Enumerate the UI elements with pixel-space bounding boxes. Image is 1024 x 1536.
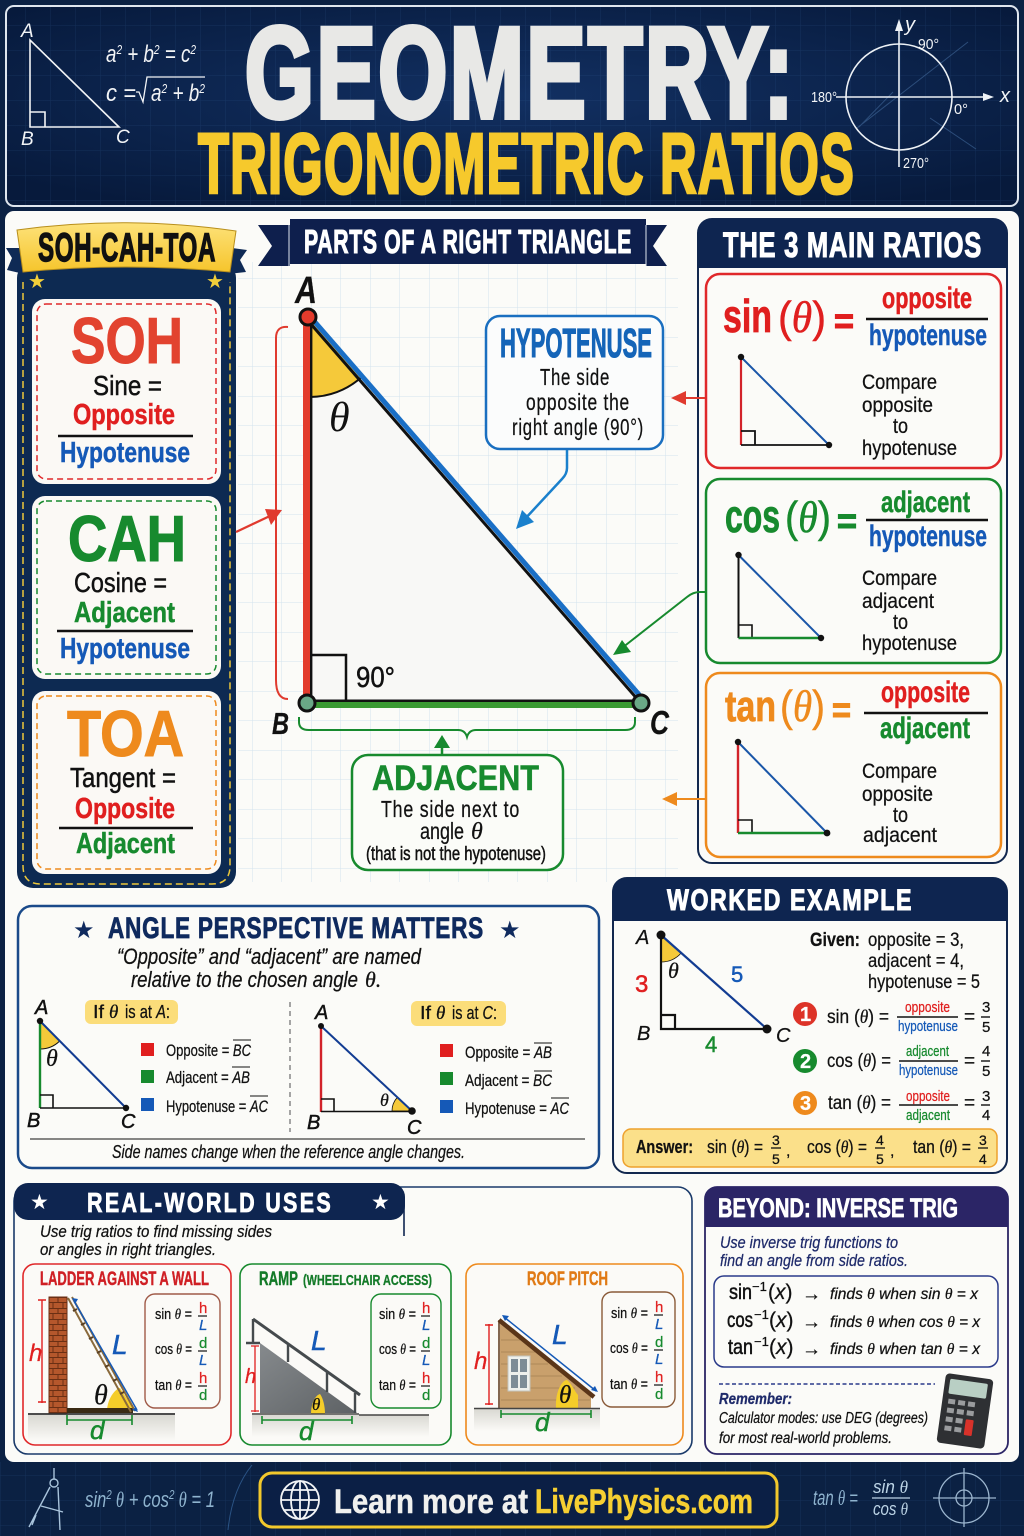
formula box: tan θ = xyxy=(610,1376,648,1393)
step 3: 3 xyxy=(982,1088,990,1105)
inverse function table: −1 xyxy=(752,1279,767,1294)
step 1: = xyxy=(964,1007,975,1028)
illustration: ladder xyxy=(28,1297,175,1445)
illustration: house roof: θ xyxy=(559,1382,571,1409)
card: cosine: to xyxy=(893,611,908,634)
formula box: h xyxy=(422,1300,430,1317)
card: ladder against a wall xyxy=(23,1264,231,1445)
card: ramp: (WHEELCHAIR ACCESS) xyxy=(303,1272,432,1289)
callout: adjacent: (that is not the hypotenuse) xyxy=(366,844,546,865)
callout: hypotenuse xyxy=(486,316,663,449)
case: theta at C: C xyxy=(407,1117,422,1139)
card: cosine: hypotenuse xyxy=(862,632,957,655)
formula box: h xyxy=(199,1370,207,1387)
inverse function table: → xyxy=(802,1312,821,1333)
inverse function table: finds θ when tan θ = x xyxy=(830,1341,981,1358)
card: CAH xyxy=(32,496,221,679)
identity formula: + cos xyxy=(130,1487,183,1512)
inverse function table xyxy=(714,1276,998,1367)
case: theta at A xyxy=(27,997,269,1133)
inverse function table: → xyxy=(802,1284,821,1305)
card: CAH: Adjacent xyxy=(74,597,175,629)
card: tangent: Compare xyxy=(862,760,937,783)
formula box: h xyxy=(422,1370,430,1387)
case: theta at C: Hypotenuse = AC xyxy=(465,1099,570,1118)
case: theta at C: B xyxy=(307,1112,320,1134)
panel: beyond inverse trig xyxy=(705,1187,1008,1454)
formula box: cos θ = xyxy=(379,1341,416,1358)
answer bar: , xyxy=(890,1143,894,1160)
inverse function table: (x) xyxy=(769,1336,794,1359)
step 2: adjacent xyxy=(906,1043,950,1060)
step 3: tan (θ) = xyxy=(828,1093,891,1114)
formula box: d xyxy=(655,1386,663,1403)
vertex labels: A xyxy=(294,270,317,312)
formula box xyxy=(602,1292,675,1407)
side: adjacent xyxy=(306,700,641,708)
card: cosine: cos xyxy=(725,490,780,542)
callout: adjacent: The side next to xyxy=(381,796,520,822)
arrow: hypotenuse callout to side xyxy=(516,450,567,529)
illustration: house roof: d xyxy=(535,1407,551,1437)
case: theta at C: θ xyxy=(436,1003,445,1024)
pythagorean formulas: 2 xyxy=(116,42,123,57)
formula box: h xyxy=(655,1369,663,1386)
remember note: Calculator modes: use DEG (degrees) xyxy=(719,1410,928,1427)
formula box: cos θ = xyxy=(155,1341,192,1358)
answer bar: 4 xyxy=(979,1151,987,1167)
answer bar: tan (θ) = xyxy=(913,1137,971,1157)
triangle diagram: 3 xyxy=(635,971,648,998)
formula box: tan θ = xyxy=(379,1377,416,1394)
given values: hypotenuse = 5 xyxy=(868,972,980,993)
card: SOH: SOH xyxy=(71,304,183,377)
remember note xyxy=(719,1391,928,1447)
step 1: sin (θ) = xyxy=(827,1007,889,1028)
bracket: opposite side with arrow from SOH xyxy=(236,327,288,699)
illustration: ladder: θ xyxy=(94,1380,108,1411)
formula box: sin θ = xyxy=(611,1305,648,1322)
step 1 xyxy=(793,999,990,1036)
formula box: L xyxy=(422,1352,430,1369)
card: CAH: CAH xyxy=(68,502,186,575)
step 2: 4 xyxy=(982,1043,990,1060)
case: theta at A: A xyxy=(34,997,48,1019)
description xyxy=(117,944,422,992)
formula box: d xyxy=(655,1334,663,1351)
card: tangent: opposite xyxy=(862,783,933,806)
identity formula: 2 xyxy=(106,1487,112,1502)
arrow: adjacent callout to brace xyxy=(434,735,450,756)
arrow: tangent card to adjacent xyxy=(662,792,705,806)
description: Use inverse trig functions to xyxy=(720,1234,898,1252)
step 2: 5 xyxy=(982,1063,990,1080)
inverse function table: cos xyxy=(727,1309,753,1332)
remember note: Remember: xyxy=(719,1391,792,1408)
given values: opposite = 3, xyxy=(868,930,964,951)
triangle diagram: 4 xyxy=(705,1032,717,1057)
card: TOA: Tangent = xyxy=(70,762,176,793)
triangle diagram xyxy=(635,927,791,1057)
right angle marker xyxy=(311,655,346,701)
triangle diagram: B xyxy=(637,1023,650,1045)
card: tangent xyxy=(706,673,1001,857)
pythagorean formulas: + b xyxy=(122,41,154,68)
case: theta at C: Opposite = AB xyxy=(465,1043,552,1062)
formula box: L xyxy=(199,1317,207,1334)
heading tab xyxy=(14,1183,405,1236)
formula box: cos θ = xyxy=(610,1340,648,1357)
vertex dots xyxy=(299,309,649,711)
card: cosine: = xyxy=(837,500,857,541)
card: cosine: (θ) xyxy=(785,493,831,542)
callout: hypotenuse: The side xyxy=(540,364,610,390)
step 1: 5 xyxy=(982,1019,990,1036)
vertex labels: B xyxy=(272,706,289,741)
illustration: ramp xyxy=(245,1319,429,1446)
card: ladder against a wall: LADDER AGAINST A WALL xyxy=(40,1269,209,1290)
inverse function table: → xyxy=(802,1339,821,1360)
arrow: sine card to hypotenuse callout xyxy=(671,391,705,405)
header banner xyxy=(6,2,1018,212)
panel: worked example xyxy=(613,878,1007,1173)
pythagorean formulas: 2 xyxy=(153,42,160,57)
card: sine: hypotenuse xyxy=(862,437,957,460)
icon: crosshair xyxy=(933,1468,996,1527)
answer bar: cos (θ) = xyxy=(807,1137,867,1157)
card: tangent: = xyxy=(832,689,851,730)
callout: hypotenuse: right angle (90°) xyxy=(512,414,644,440)
inverse function table: finds θ when sin θ = x xyxy=(830,1286,979,1303)
icon: unit circle: x xyxy=(999,85,1011,107)
icon: calculator xyxy=(936,1373,994,1449)
icon: unit circle xyxy=(811,14,1011,172)
case: theta at A: Opposite = BC xyxy=(166,1041,252,1060)
icon: unit circle: 0° xyxy=(954,101,968,118)
callout: hypotenuse: HYPOTENUSE xyxy=(500,320,652,366)
pythagorean formulas: + b xyxy=(167,80,199,107)
tangent identity xyxy=(813,1477,910,1519)
heading: WORKED EXAMPLE xyxy=(667,884,913,917)
banner ribbon: ★ xyxy=(28,271,46,293)
diagram: main right triangle xyxy=(272,270,670,741)
formula box: d xyxy=(199,1387,207,1404)
card: roof pitch xyxy=(466,1264,683,1445)
vertex labels xyxy=(272,270,670,741)
icon: globe xyxy=(281,1481,319,1519)
identity formula: = 1 xyxy=(193,1487,224,1512)
call to action button: LivePhysics.com xyxy=(535,1483,753,1521)
vertex labels: C xyxy=(650,704,670,741)
icon: unit circle: 180° xyxy=(811,89,837,106)
answer bar: 5 xyxy=(772,1151,780,1167)
triangle diagram: θ xyxy=(668,958,679,983)
step 3: opposite xyxy=(906,1088,950,1105)
formula box: L xyxy=(655,1351,663,1368)
case: theta at A: Adjacent = AB xyxy=(166,1068,250,1087)
case: theta at A: B xyxy=(27,1110,40,1132)
step 2: hypotenuse xyxy=(899,1062,958,1079)
inverse function table: −1 xyxy=(754,1307,769,1322)
call to action button xyxy=(260,1473,777,1527)
illustration: house roof: L xyxy=(552,1319,568,1350)
card: roof pitch: ROOF PITCH xyxy=(527,1269,608,1290)
card: SOH: Sine = xyxy=(93,370,162,401)
illustration: ladder: L xyxy=(112,1329,128,1360)
case: theta at C: A xyxy=(314,1002,328,1024)
title line 1: GEOMETRY: xyxy=(245,2,796,145)
step 1: hypotenuse xyxy=(898,1018,958,1035)
card: tangent: to xyxy=(893,804,908,827)
given values: adjacent = 4, xyxy=(868,951,964,972)
answer bar: 4 xyxy=(876,1132,884,1148)
tangent identity: cos θ xyxy=(873,1499,908,1519)
pythagorean formulas: a xyxy=(151,80,164,107)
formula box xyxy=(145,1294,220,1408)
formula box: d xyxy=(422,1335,430,1352)
illustration: house roof xyxy=(474,1315,600,1437)
pythagorean formulas: = c xyxy=(160,41,190,68)
icon: drafting compass xyxy=(29,1468,63,1530)
pythagorean formulas: 2 xyxy=(190,42,197,57)
card: CAH: Hypotenuse xyxy=(60,633,190,665)
case: theta at A: θ xyxy=(46,1046,58,1072)
card: sine: sin xyxy=(723,290,772,342)
illustration: ladder: d xyxy=(90,1415,106,1445)
given values xyxy=(810,930,980,993)
card: tangent: tan xyxy=(725,682,776,731)
arrow: cosine card to hypotenuse xyxy=(613,592,706,655)
card: cosine: Compare xyxy=(862,567,937,590)
illustration: ramp: h xyxy=(245,1366,256,1388)
description: find an angle from side ratios. xyxy=(720,1252,908,1270)
card: sine: = xyxy=(834,300,854,341)
identity formula: 2 xyxy=(168,1487,175,1502)
card: tangent: (θ) xyxy=(780,682,825,731)
inverse function table: finds θ when cos θ = x xyxy=(830,1314,981,1331)
card: SOH: Opposite xyxy=(73,399,175,431)
card: SOH xyxy=(32,299,221,484)
description: “Opposite” and “adjacent” are named xyxy=(117,944,422,969)
step 3: 4 xyxy=(982,1107,990,1124)
case: theta at C xyxy=(307,1001,570,1139)
step 2 xyxy=(793,1043,990,1080)
formula box: L xyxy=(655,1316,663,1333)
icon: header right triangle: A xyxy=(20,21,34,42)
card: cosine: adjacent xyxy=(862,590,934,613)
heading: parts of a right triangle ribbon: PARTS OF A RIGHT TRIANGLE xyxy=(304,223,632,260)
heading: ★ xyxy=(499,917,521,944)
callout: hypotenuse: opposite the xyxy=(526,389,630,415)
card: tangent: opposite xyxy=(881,676,970,709)
description: or angles in right triangles. xyxy=(40,1240,216,1259)
card: ramp: RAMP xyxy=(259,1269,298,1290)
card: tangent: adjacent xyxy=(863,824,937,847)
step 1: opposite xyxy=(905,999,950,1016)
description xyxy=(720,1234,908,1270)
heading tab: REAL-WORLD USES xyxy=(87,1187,333,1218)
icon: header right triangle: B xyxy=(21,129,34,150)
card: TOA xyxy=(32,691,221,874)
case: theta at A: θ xyxy=(109,1002,118,1023)
card: tangent: adjacent xyxy=(880,712,970,745)
description: Use trig ratios to find missing sides xyxy=(40,1222,272,1241)
banner ribbon xyxy=(6,223,247,293)
step 1: 3 xyxy=(982,999,990,1016)
banner ribbon: SOH-CAH-TOA xyxy=(38,226,216,270)
callout: adjacent: θ xyxy=(471,819,483,845)
heading: ★ xyxy=(73,917,95,944)
icon: header right triangle: C xyxy=(116,127,130,148)
identity formula: θ xyxy=(174,1487,187,1512)
case: theta at C: θ xyxy=(380,1090,389,1110)
step 3 xyxy=(793,1088,990,1124)
answer bar: 3 xyxy=(979,1132,987,1148)
formula box: tan θ = xyxy=(155,1377,192,1394)
tangent identity: sin θ xyxy=(873,1477,908,1497)
answer bar: 5 xyxy=(876,1151,884,1167)
card: SOH: Hypotenuse xyxy=(60,437,190,469)
illustration: ramp: θ xyxy=(312,1395,320,1414)
card: sine: Compare xyxy=(862,371,937,394)
heading tab: ★ xyxy=(371,1191,390,1214)
description xyxy=(40,1222,272,1259)
case: theta at A: C xyxy=(121,1111,136,1133)
card: sine: (θ) xyxy=(778,293,826,342)
icon: unit circle: y xyxy=(903,14,916,36)
angle theta sector xyxy=(310,320,360,397)
90 degree label: 90° xyxy=(356,662,395,694)
theta symbol: θ xyxy=(329,395,350,441)
step 2: cos (θ) = xyxy=(827,1051,891,1072)
banner ribbon: ★ xyxy=(206,271,224,293)
inverse function table: (x) xyxy=(768,1281,792,1304)
side: opposite xyxy=(303,320,312,703)
pythagorean formulas: c = xyxy=(106,80,136,107)
identity formula: θ xyxy=(112,1487,124,1512)
case: theta at C: is at C: xyxy=(452,1003,497,1023)
step 2: = xyxy=(964,1051,975,1072)
formula box: L xyxy=(199,1352,207,1369)
panel: SOH-CAH-TOA xyxy=(6,223,247,888)
illustration: ramp: d xyxy=(299,1416,315,1446)
card: sine xyxy=(706,274,1001,468)
illustration: ladder: h xyxy=(29,1340,42,1367)
formula box: sin θ = xyxy=(379,1306,416,1323)
identity formula: sin xyxy=(85,1487,113,1512)
formula box: h xyxy=(655,1299,663,1316)
card: TOA: TOA xyxy=(67,697,184,770)
triangle diagram: A xyxy=(635,927,649,949)
brace: adjacent side xyxy=(299,717,635,737)
card: TOA: Adjacent xyxy=(76,828,175,860)
tangent identity: tan θ = xyxy=(813,1486,858,1510)
pythagorean formulas: 2 xyxy=(161,81,168,96)
footer xyxy=(29,1465,996,1530)
case: theta at A: is at A: xyxy=(125,1002,170,1022)
formula box: h xyxy=(199,1300,207,1317)
remember note: for most real-world problems. xyxy=(719,1430,892,1447)
illustration: house roof: h xyxy=(474,1348,487,1375)
card: cosine: adjacent xyxy=(881,486,970,519)
triangle diagram: 5 xyxy=(731,962,743,987)
call to action button: Learn more at xyxy=(334,1483,528,1521)
heading: ANGLE PERSPECTIVE MATTERS xyxy=(108,912,484,945)
panel header xyxy=(698,219,1007,268)
triangle diagram: C xyxy=(776,1025,791,1047)
pythagorean formulas: 2 xyxy=(199,81,206,96)
answer bar: Answer: xyxy=(636,1137,693,1157)
inverse function table: tan xyxy=(728,1336,753,1359)
illustration: ramp: L xyxy=(311,1325,327,1356)
card: TOA: Opposite xyxy=(75,793,175,825)
heading tab: ★ xyxy=(30,1191,49,1214)
step 3: 3 xyxy=(800,1093,811,1115)
formula box xyxy=(371,1294,441,1408)
panel: the 3 main ratios xyxy=(698,219,1007,863)
card: ramp xyxy=(240,1264,451,1446)
description: θ. xyxy=(365,967,381,992)
pythagorean formulas xyxy=(106,41,206,107)
icon: unit circle: 270° xyxy=(903,155,929,172)
footnote: Side names change when the reference angle changes. xyxy=(112,1142,465,1162)
description: relative to the chosen angle xyxy=(131,967,358,992)
formula box: sin θ = xyxy=(155,1306,192,1323)
panel: angle perspective matters xyxy=(18,906,599,1168)
card: cosine xyxy=(706,479,1001,663)
callout: adjacent xyxy=(352,755,563,870)
answer bar: sin (θ) = xyxy=(707,1137,763,1157)
icon: unit circle: 90° xyxy=(918,36,939,53)
card: sine: opposite xyxy=(882,282,972,315)
case: theta at A: If xyxy=(93,1002,105,1022)
given values: Given: xyxy=(810,930,860,951)
icon: header right triangle xyxy=(20,21,130,150)
step 3: = xyxy=(964,1093,975,1114)
callout: adjacent: angle xyxy=(420,818,464,844)
inverse function table: (x) xyxy=(769,1309,794,1332)
step 3: adjacent xyxy=(906,1107,951,1124)
callout: adjacent: ADJACENT xyxy=(372,759,539,798)
card: sine: opposite xyxy=(862,394,933,417)
answer bar xyxy=(623,1129,997,1167)
panel: real-world uses xyxy=(14,1183,692,1454)
case: theta at C: If xyxy=(420,1003,432,1023)
case: theta at A: Hypotenuse = AC xyxy=(166,1097,269,1116)
card: sine: to xyxy=(893,415,908,438)
inverse function table: −1 xyxy=(754,1334,769,1349)
formula box: L xyxy=(422,1317,430,1334)
formula box: d xyxy=(199,1335,207,1352)
heading: parts of a right triangle ribbon xyxy=(258,219,667,266)
inverse function table: sin xyxy=(729,1281,752,1304)
side: hypotenuse xyxy=(310,321,642,701)
step 2: 2 xyxy=(800,1051,811,1073)
formula box: d xyxy=(422,1387,430,1404)
answer bar: 3 xyxy=(772,1132,780,1148)
pythagorean formulas: a xyxy=(106,41,119,68)
case: theta at C: Adjacent = BC xyxy=(465,1071,553,1090)
answer bar: , xyxy=(786,1143,790,1160)
card: CAH: Cosine = xyxy=(74,567,167,598)
step 1: 1 xyxy=(800,1004,811,1026)
